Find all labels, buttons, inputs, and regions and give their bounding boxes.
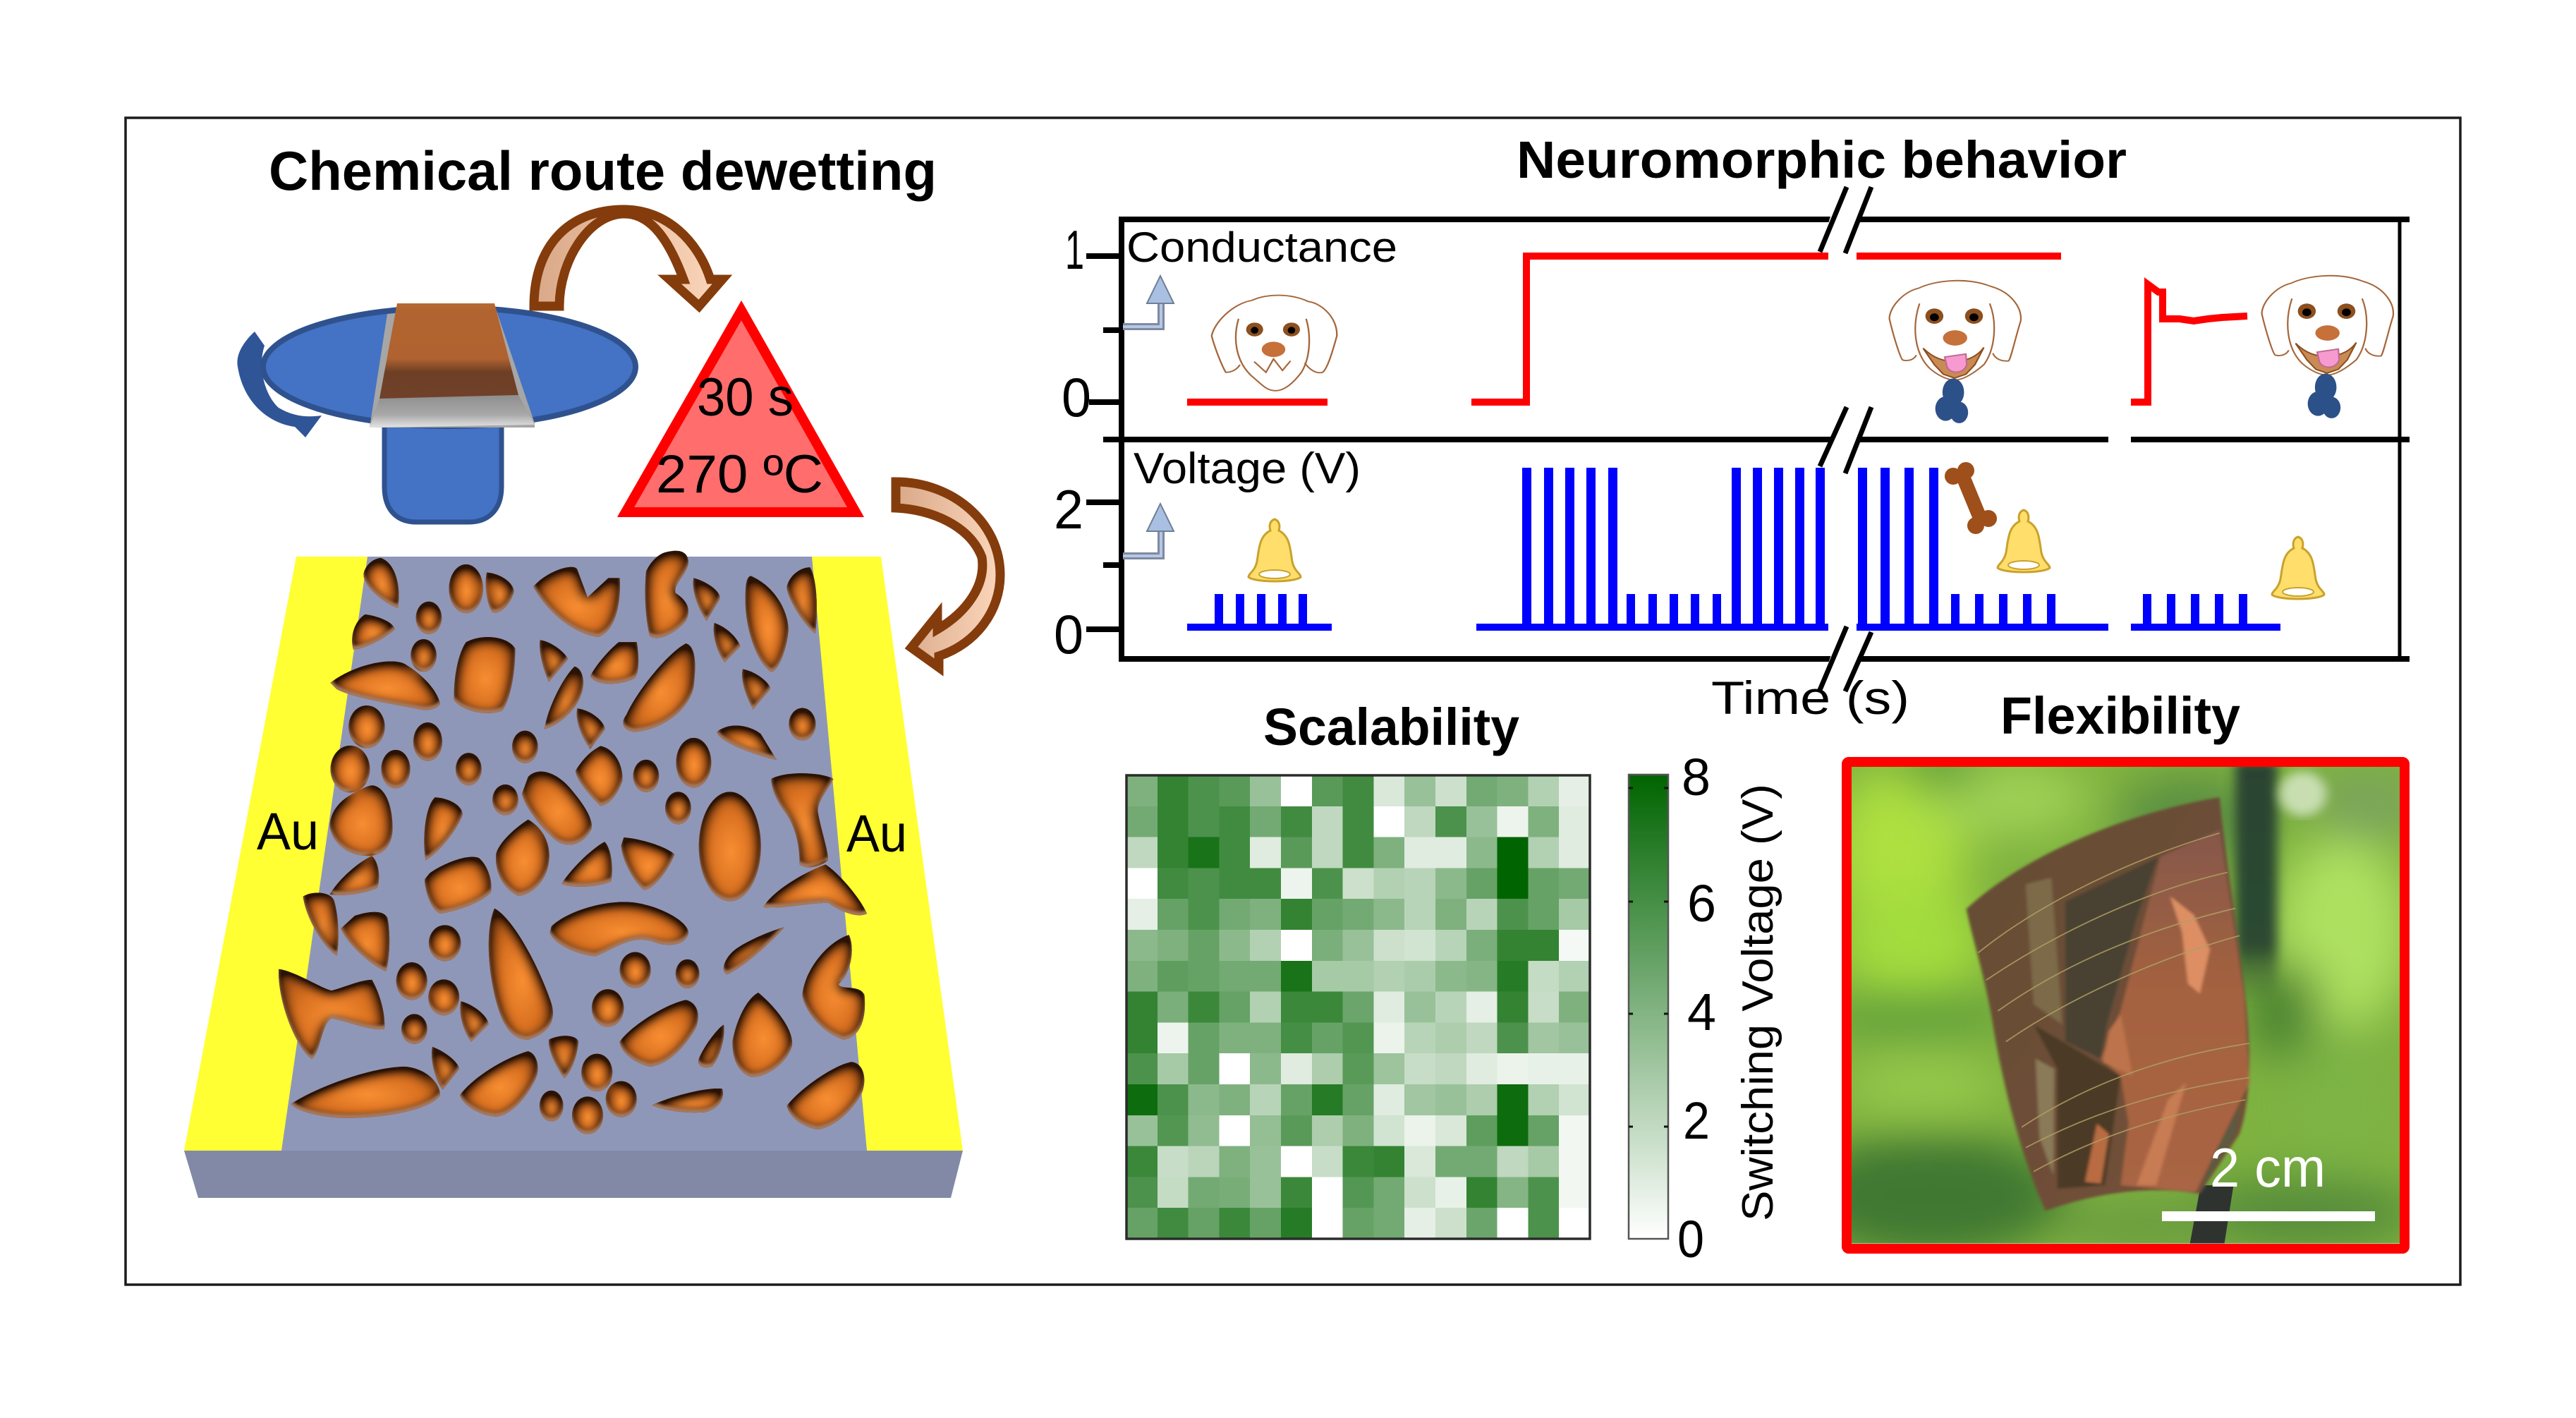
neuromorphic chart [1054,187,2410,724]
heatmap [1126,775,1590,1239]
left electrode label: Au [257,802,319,861]
icon: dog happy recall [2262,276,2393,418]
heading: flexibility: Flexibility [2000,686,2240,745]
spin coater stem [384,423,502,522]
tick label voltage 2: 2 [1054,478,1083,540]
substrate front face [184,1151,963,1198]
voltage axis label: Voltage (V) [1134,444,1361,493]
colorbar ticks [1629,788,1668,1127]
tick label conductance 0: 0 [1062,366,1091,428]
colorbar label 4: 4 [1687,983,1716,1041]
outer frame [126,118,2460,1285]
right electrode label: Au [846,804,907,863]
colorbar label 0: 0 [1677,1210,1704,1268]
channel surface [281,557,867,1151]
heatmap cells [1126,775,1590,1239]
time label: 30 s [697,368,794,428]
scale bar [2162,1211,2375,1221]
icon: dog neutral [1212,296,1337,391]
substrate copper film [379,303,518,399]
curved arrow: spin to anneal [534,210,722,306]
colorbar label 6: 6 [1687,874,1716,933]
icon: bone [1945,462,1997,534]
spin coater disk [263,308,636,426]
anneal triangle [626,310,856,512]
heading: neuromorphic behavior: Neuromorphic behavior [1517,131,2127,189]
icon: bell conditioned stimulus [1248,519,1301,581]
tick label conductance 1: 1 [1065,219,1084,281]
triangle shape [626,310,856,512]
heatmap border [1126,775,1590,1239]
arrow: voltage axis [1123,504,1174,556]
conductance axis label: Conductance [1126,224,1397,271]
time axis label: Time (s) [1711,672,1909,724]
photo: flexible device [1842,757,2410,1254]
gold electrodes [184,557,963,1151]
colorbar axis title: Switching Voltage (V) [1734,784,1782,1221]
axis break marks [1820,187,1871,691]
voltage pulse trains [1187,468,2280,631]
colorbar ramp [1629,775,1668,1239]
heading: chemical route dewetting: Chemical route dewetting [269,140,937,202]
colorbar [1629,748,1782,1268]
photo red border [1847,762,2405,1249]
arrow: conductance axis [1123,276,1174,327]
scale label: 2 cm [2210,1137,2326,1199]
axes [1086,217,2410,662]
device schematic [184,551,963,1198]
substrate gray front face [370,395,535,428]
colorbar label 8: 8 [1682,748,1711,806]
colorbar label 2: 2 [1683,1091,1710,1150]
photo content [1852,767,2400,1243]
icon: bell during training [1998,510,2050,572]
icon: dog happy with bone drool [1890,281,2021,423]
copper dewetted islands [279,551,867,1134]
icon: bell recall [2272,537,2324,599]
spin coater [237,303,636,522]
conductance trace [1187,256,2247,402]
spin direction arrow [237,332,322,437]
curved arrow: anneal to device [896,482,1000,667]
substrate gray body [370,305,535,428]
tick label voltage 0: 0 [1054,603,1083,665]
temperature label: 270 ºC [656,444,823,504]
axis break gaps [1828,212,1859,665]
heading: scalability: Scalability [1263,698,1519,756]
